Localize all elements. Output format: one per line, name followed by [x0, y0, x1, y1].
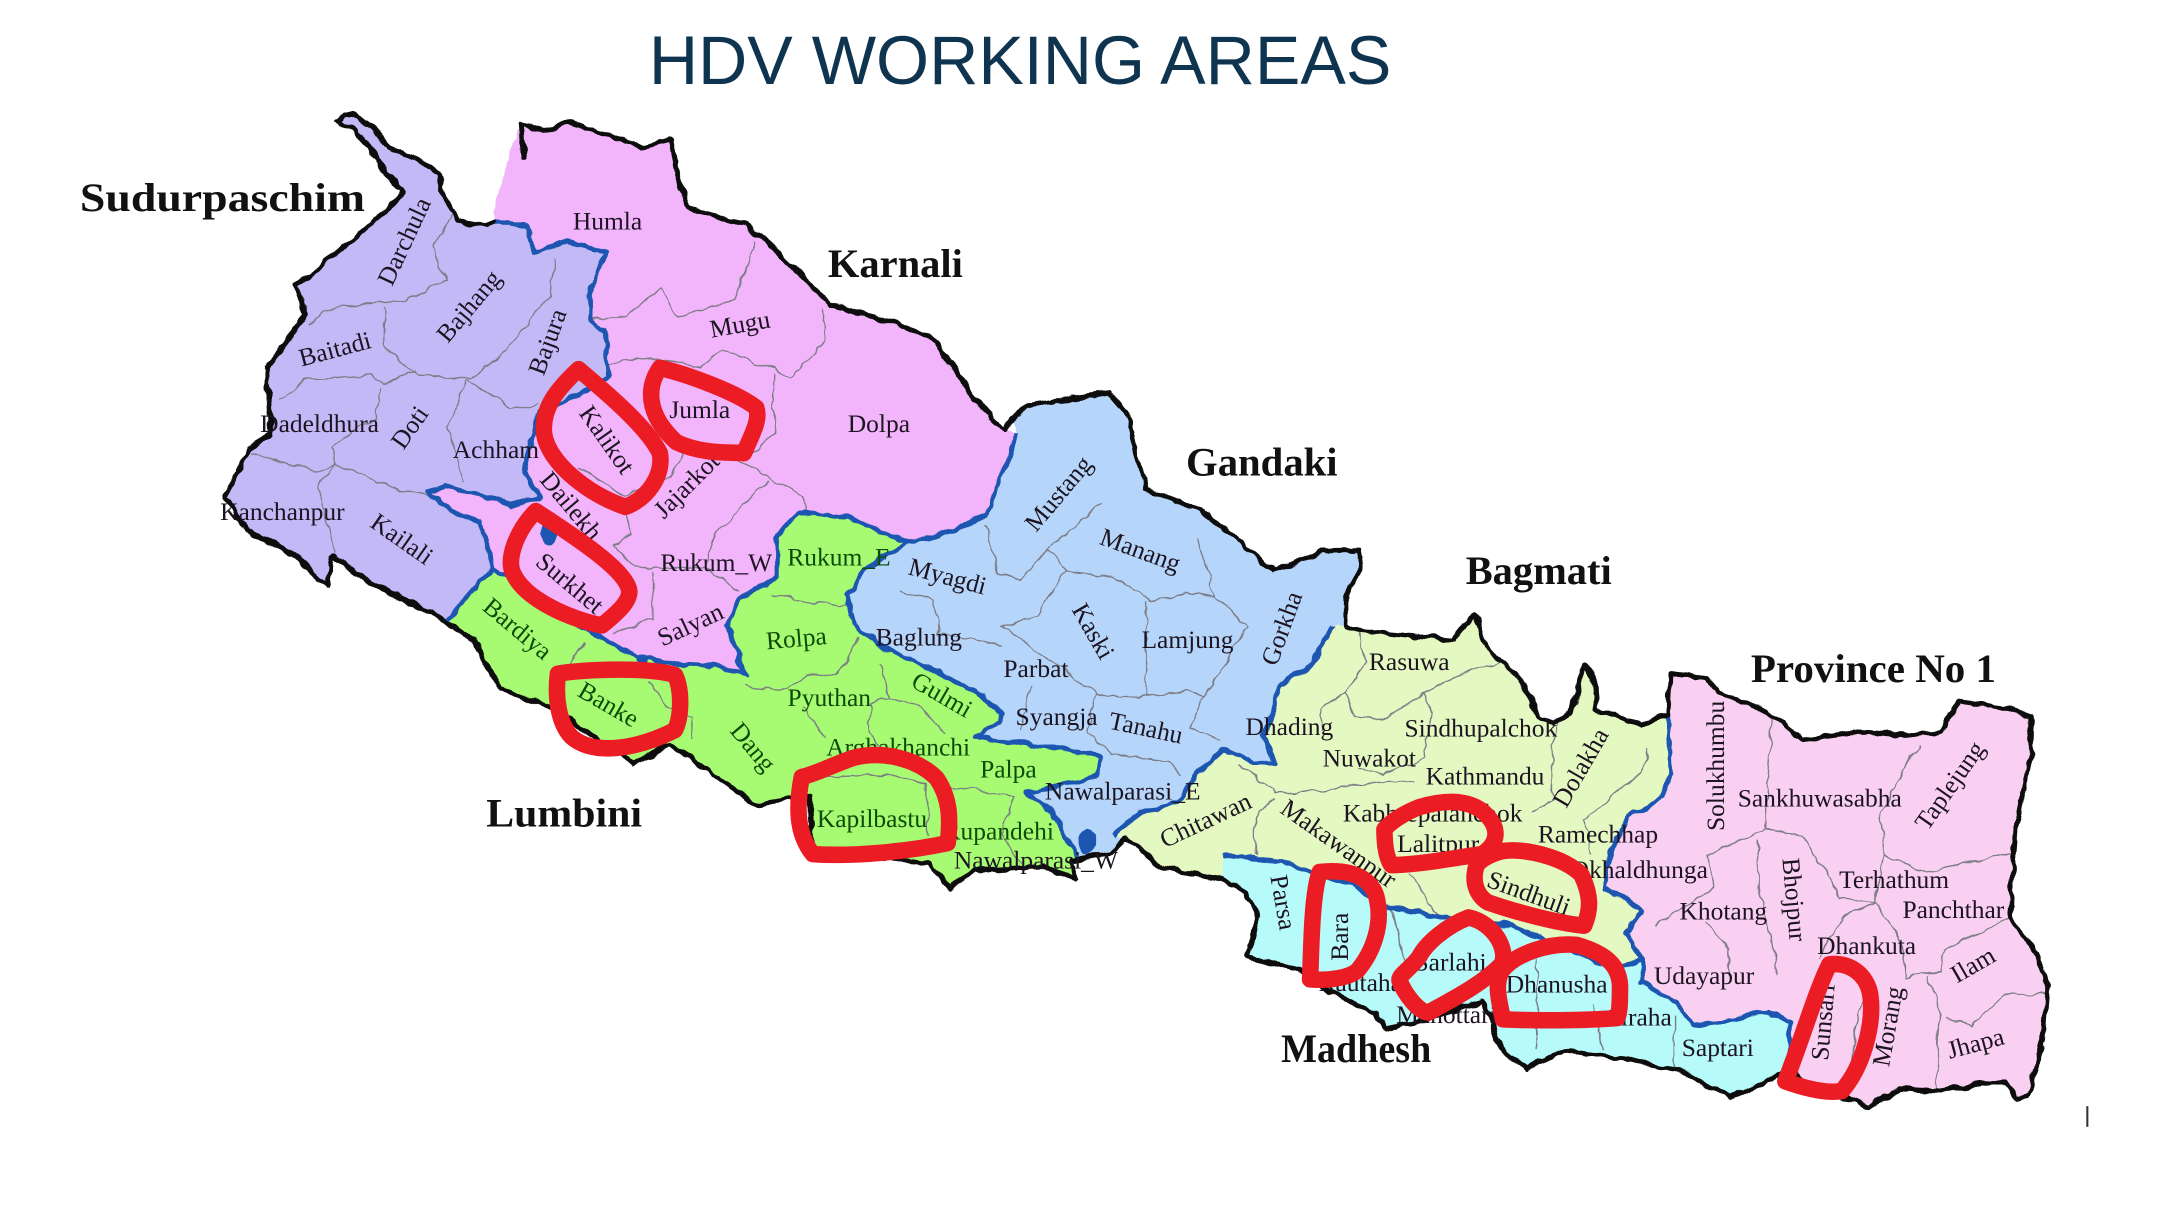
province labels: Province No 1 [1751, 646, 1996, 691]
district labels: Kanchanpur [220, 497, 345, 526]
district labels: Bajura [522, 305, 573, 379]
district labels: Myagdi [906, 552, 990, 600]
district labels: Sarlahi [1414, 947, 1487, 976]
district labels: Dhanusha [1506, 969, 1608, 998]
district labels: Arghakhanchi [826, 733, 970, 762]
district labels: Dang [724, 716, 782, 778]
district labels: Nuwakot [1323, 744, 1416, 773]
district labels: Taplejung [1909, 735, 1991, 835]
district labels: Terhathum [1839, 865, 1949, 894]
district labels: Syangja [1016, 702, 1098, 731]
district labels: Jumla [669, 395, 730, 424]
district labels: Tanahu [1107, 706, 1186, 750]
small dark mark [2086, 1106, 2088, 1127]
red circles: working districts [511, 368, 1871, 1092]
district labels: Rupandehi [944, 817, 1054, 846]
district labels: Parbat [1003, 654, 1068, 683]
district labels: Bhojpur [1776, 857, 1813, 943]
title: HDV WORKING AREAS [649, 22, 1391, 99]
district labels: Banke [573, 675, 644, 733]
district labels: Morang [1866, 984, 1909, 1069]
district labels: Solukhumbu [1701, 701, 1730, 831]
province: Karnali [427, 121, 1015, 675]
district labels: Bara [1325, 913, 1354, 961]
district labels: Kapilbastu [817, 804, 927, 833]
national border [226, 113, 2047, 1108]
province: Sudurpaschim [226, 113, 608, 621]
district labels: Chitawan [1155, 786, 1256, 854]
district labels: Jhapa [1944, 1022, 2007, 1065]
district labels: Gulmi [907, 666, 977, 723]
district labels: Baglung [876, 622, 962, 651]
district labels: Baitadi [296, 325, 374, 372]
province labels: Gandaki [1186, 439, 1338, 484]
district labels: Parsa [1264, 873, 1303, 932]
district labels: Dailekh [534, 466, 609, 546]
province: Gandaki [847, 393, 1361, 857]
district labels: Achham [453, 435, 539, 464]
district labels: Dolakha [1546, 723, 1615, 812]
province: Province No 1 [1603, 674, 2047, 1108]
district labels: Sindhupalchok [1404, 713, 1558, 742]
district labels: Kailali [365, 507, 439, 571]
district labels: Manang [1096, 522, 1185, 578]
district labels: Surkhet [530, 546, 610, 620]
province labels: Madhesh [1281, 1026, 1431, 1071]
district labels: Dhading [1246, 712, 1334, 741]
province and district geometry [226, 113, 2048, 1108]
district labels: Kabhrepalanchok [1343, 799, 1523, 828]
province labels: Sudurpaschim [80, 175, 365, 220]
district labels: Darchula [371, 193, 437, 290]
province: Madhesh [1222, 855, 1791, 1098]
district labels: Kathmandu [1426, 761, 1545, 790]
map of Nepal [80, 113, 2048, 1108]
district labels: Udayapur [1654, 961, 1755, 990]
district labels: Okhaldhunga [1571, 855, 1708, 884]
district labels: Pyuthan [788, 683, 871, 712]
district labels: Kaski [1066, 598, 1121, 664]
district labels: Saptari [1682, 1033, 1754, 1062]
district labels: Rukum_W [660, 548, 772, 577]
district labels: Humla [573, 206, 642, 235]
district labels: Mahottari [1396, 1000, 1497, 1029]
district labels: Sankhuwasabha [1738, 784, 1902, 813]
district labels: Lalitpur [1397, 829, 1480, 858]
province: Lumbini [446, 511, 1101, 889]
province labels: Lumbini [486, 791, 642, 836]
district labels: Khotang [1679, 896, 1767, 925]
province labels: Karnali [828, 241, 963, 286]
district labels: Nawalparasi_E [1045, 777, 1200, 806]
district labels: Panchthar [1902, 895, 2005, 924]
district labels: Dadeldhura [260, 409, 379, 438]
district labels: Dhankuta [1817, 931, 1916, 960]
district labels: Kalikot [573, 400, 641, 479]
province labels: Bagmati [1466, 548, 1612, 593]
district labels: Jajarkot [648, 446, 725, 524]
province labels [80, 175, 1996, 1071]
district labels: Gorkha [1255, 587, 1308, 669]
district labels: Rautahat [1319, 968, 1409, 997]
district labels: Bardiya [477, 591, 558, 666]
district labels: Lamjung [1141, 625, 1234, 654]
district labels: Rasuwa [1369, 647, 1450, 676]
district labels: Bajhang [430, 264, 507, 348]
district labels: Rolpa [765, 621, 828, 655]
district labels: Salyan [653, 597, 728, 652]
district labels: Siraha [1607, 1003, 1672, 1032]
district labels: Palpa [980, 755, 1037, 784]
district labels: Makawanpur [1275, 793, 1403, 894]
district labels: Sunsari [1805, 983, 1841, 1062]
district labels: Mugu [707, 305, 773, 344]
district labels: Mustang [1019, 450, 1098, 537]
district labels: Ilam [1945, 940, 2000, 989]
district labels: Nawalparasi_W [954, 846, 1118, 875]
district labels: Rukum_E [787, 542, 891, 571]
district labels [220, 193, 2007, 1069]
province: Bagmati [1113, 614, 1671, 968]
district labels: Ramechhap [1538, 819, 1658, 848]
district labels: Doti [385, 400, 434, 454]
district labels: Sindhuli [1483, 865, 1574, 921]
district labels: Dolpa [848, 409, 910, 438]
